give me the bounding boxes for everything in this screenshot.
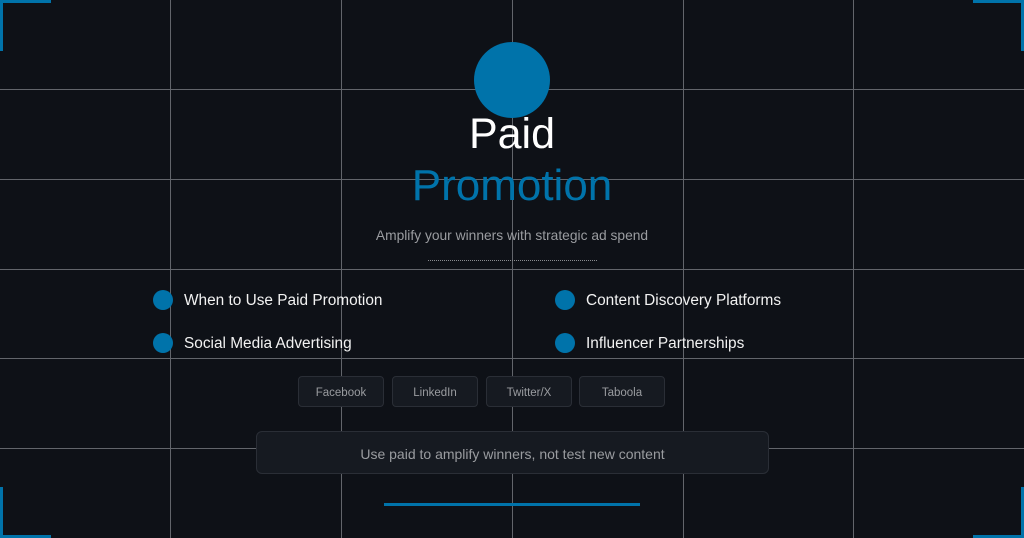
subtitle: Amplify your winners with strategic ad spend — [376, 228, 648, 243]
corner bracket: bottom-left — [0, 487, 51, 538]
tag: taboola: Taboola — [602, 387, 642, 399]
callout: Use paid to amplify winners, not test new content — [360, 446, 665, 462]
bullet: social media: Social Media Advertising — [184, 335, 352, 352]
bullet: when to use: When to Use Paid Promotion — [184, 292, 382, 309]
tag: twitter: Twitter/X — [507, 387, 551, 399]
corner bracket: bottom-right — [973, 487, 1024, 538]
tag: linkedin: LinkedIn — [413, 387, 457, 399]
tags: platforms — [298, 376, 665, 407]
tag: facebook: Facebook — [316, 387, 366, 399]
corner bracket: top-right — [973, 0, 1024, 51]
bullet: content discovery: Content Discovery Platforms — [586, 292, 781, 309]
tag: facebook — [298, 376, 384, 407]
icon: blue circle — [474, 42, 550, 118]
tag: taboola — [579, 376, 665, 407]
title — [412, 110, 612, 210]
tag: linkedin — [392, 376, 478, 407]
list: topics — [153, 290, 781, 353]
tag: twitter — [486, 376, 572, 407]
bullet: influencer: Influencer Partnerships — [586, 335, 744, 352]
title: Paid — [469, 110, 555, 158]
title: Promotion — [412, 161, 612, 210]
corner bracket: top-left — [0, 0, 51, 51]
callout — [256, 431, 769, 474]
accent line — [384, 503, 640, 506]
